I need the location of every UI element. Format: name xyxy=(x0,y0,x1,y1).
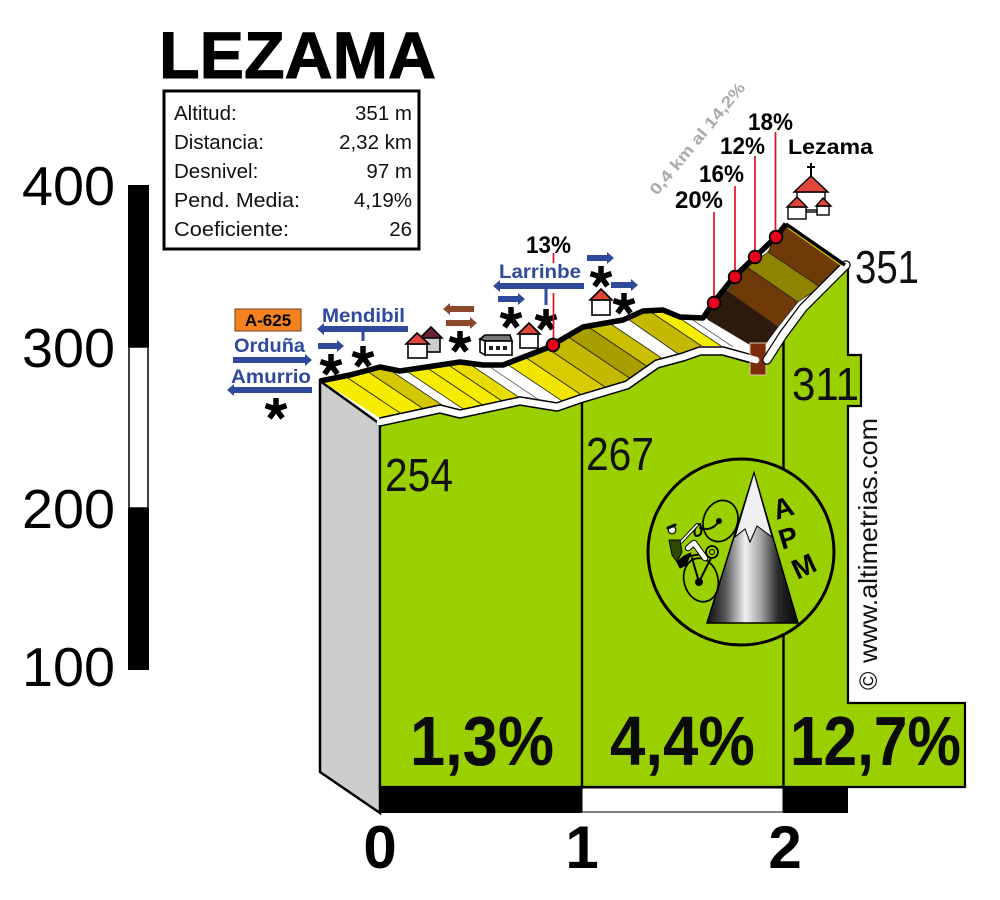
altitude labels xyxy=(385,241,919,501)
kilometre labels: 2 xyxy=(768,814,802,881)
gradient callouts: 18% xyxy=(748,109,793,136)
brown marker post xyxy=(750,343,766,375)
road sign A-625: A-625 xyxy=(245,311,291,330)
icon: house upper xyxy=(590,289,612,315)
panel: climb statistics: Distancia: xyxy=(174,131,264,154)
gradient percentages: 12,7% xyxy=(790,702,961,780)
panel: climb statistics: 351 m xyxy=(355,102,412,125)
distance bar xyxy=(380,787,848,813)
icon: house Larrinbe xyxy=(518,323,540,348)
altitude labels: 351 xyxy=(855,241,919,293)
title: LEZAMA xyxy=(159,18,436,92)
profile ridge line xyxy=(320,224,845,381)
left side face of profile xyxy=(320,381,380,813)
road labels and arrows: Orduña xyxy=(234,336,305,357)
road labels and arrows: Larrinbe xyxy=(499,262,581,283)
altitude scale: 100 xyxy=(22,636,115,698)
logo letters: M xyxy=(787,547,821,585)
panel: climb statistics: 4,19% xyxy=(354,189,412,212)
kilometre labels xyxy=(363,814,802,881)
website credit: www.altimetrias.com xyxy=(853,418,883,664)
altitude labels: 267 xyxy=(586,428,654,480)
panel: climb statistics: Desnivel: xyxy=(174,160,258,183)
altitude scale: 300 xyxy=(22,317,115,379)
icon: mountain xyxy=(707,473,798,623)
white road edge strip xyxy=(380,265,846,422)
logo letters: P xyxy=(775,520,802,555)
icon: houses Mendibil xyxy=(406,327,442,358)
altitude labels: 254 xyxy=(385,449,453,501)
green profile front face xyxy=(380,266,965,787)
kilometre dividers xyxy=(582,336,784,787)
kilometre labels: 1 xyxy=(565,814,599,881)
logo letters: A xyxy=(769,490,797,526)
gradient percentages: 1,3% xyxy=(410,702,554,780)
panel: climb statistics: Pend. Media: xyxy=(174,189,300,212)
gradient callouts: 16% xyxy=(699,161,744,188)
kilometre labels: 0 xyxy=(363,814,397,881)
brown two-way arrows xyxy=(443,303,477,329)
label: Lezama: Lezama xyxy=(788,136,873,159)
road edge strip shadow xyxy=(380,351,755,422)
gradient callouts: 12% xyxy=(720,133,765,160)
altitude scale: 400 xyxy=(22,155,115,217)
altitude labels: 311 xyxy=(792,358,859,410)
panel: climb statistics: 2,32 km xyxy=(339,131,412,154)
red gradient leader lines xyxy=(554,132,776,340)
road surface stripes xyxy=(324,312,734,418)
icon: church of Lezama xyxy=(787,163,831,219)
road labels and arrows xyxy=(227,252,638,396)
altitude scale: 200 xyxy=(22,478,115,540)
road labels and arrows: Amurrio xyxy=(231,367,311,388)
gradient callouts: 13% xyxy=(526,232,571,259)
steep section stripes xyxy=(706,223,840,345)
gray note: 0,4 km al 14,2%: 0,4 km al 14,2% xyxy=(647,80,749,199)
gradient percentages: 4,4% xyxy=(610,702,755,780)
APM logo xyxy=(648,459,834,645)
panel: climb statistics: Coeficiente: xyxy=(174,218,289,241)
altitude scale xyxy=(22,155,149,698)
logo letters xyxy=(769,490,821,585)
icon: cyclist xyxy=(668,495,744,606)
panel: climb statistics: 26 xyxy=(389,218,412,241)
gradient percentages xyxy=(410,702,961,780)
icon: asterisk markers xyxy=(266,266,634,418)
road labels and arrows: Mendibil xyxy=(322,306,405,327)
gradient callouts: 20% xyxy=(675,187,723,214)
red gradient dots xyxy=(547,231,782,351)
panel: climb statistics: Altitud: xyxy=(174,102,237,125)
road sign A-625 xyxy=(235,309,301,331)
panel: climb statistics: 97 m xyxy=(366,160,412,183)
gradient callouts xyxy=(526,109,793,259)
panel: climb statistics xyxy=(164,91,419,249)
icon: industrial building xyxy=(480,335,512,355)
website credit: © xyxy=(855,671,883,690)
